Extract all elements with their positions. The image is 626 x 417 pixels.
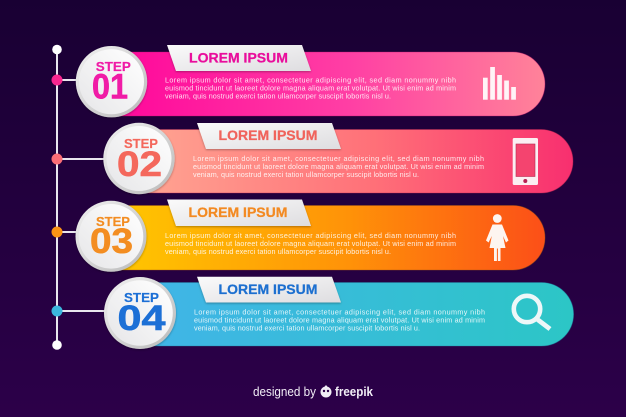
step badge 1: 01	[92, 67, 128, 106]
bar 1	[110, 52, 545, 116]
body text 2	[193, 154, 484, 179]
body text 4: veniam, quis nostrud exerci tation ullamcorper suscipit lobortis nisl u.	[194, 324, 420, 332]
body text 4: euismod tincidunt ut laoreet dolore magna aliquam erat volutpat. Ut wisi enim ad minim	[194, 316, 485, 324]
body text 3: euismod tincidunt ut laoreet dolore magna aliquam erat volutpat. Ut wisi enim ad minim	[165, 239, 456, 248]
heading ribbon 2: LOREM IPSUM	[218, 128, 318, 143]
panel: step 2	[103, 123, 573, 194]
bar 3	[110, 206, 545, 270]
step badge 4: STEP	[124, 290, 159, 305]
step badge 4: 04	[118, 299, 166, 338]
body text 2: veniam, quis nostrud exerci tation ullamcorper suscipit lobortis nisl u.	[193, 170, 419, 179]
body text 1: Lorem ipsum dolor sit amet, consectetuer adipiscing elit, sed diam nonummy nibh	[165, 76, 456, 84]
bar 4	[138, 282, 574, 346]
body text 3: veniam, quis nostrud exerci tation ullamcorper suscipit lobortis nisl u.	[165, 247, 391, 256]
body text 4: Lorem ipsum dolor sit amet, consectetuer adipiscing elit, sed diam nonummy nibh	[194, 308, 485, 316]
timeline	[52, 45, 115, 350]
body text 1: veniam, quis nostrud exerci tation ullamcorper suscipit lobortis nisl u.	[165, 92, 391, 100]
body text 3: Lorem ipsum dolor sit amet, consectetuer adipiscing elit, sed diam nonummy nibh	[165, 231, 456, 240]
step badge 4	[104, 277, 176, 349]
heading ribbon 2	[197, 123, 341, 149]
panel: step 3	[76, 200, 545, 272]
icon: bar chart	[483, 67, 516, 100]
step badge 1	[76, 46, 147, 117]
icon: woman	[486, 214, 508, 261]
heading ribbon 3: LOREM IPSUM	[188, 205, 288, 220]
heading ribbon 4	[197, 277, 341, 302]
body text 2: Lorem ipsum dolor sit amet, consectetuer adipiscing elit, sed diam nonummy nibh	[193, 154, 484, 163]
body text 1	[165, 76, 456, 100]
heading ribbon 1	[167, 45, 311, 71]
footer credit	[253, 384, 374, 399]
footer credit: designed by	[253, 385, 317, 399]
heading ribbon 4: LOREM IPSUM	[218, 282, 318, 297]
panel: step 4	[104, 277, 574, 349]
step badge 3: STEP	[96, 214, 130, 229]
heading ribbon 1: LOREM IPSUM	[189, 51, 288, 66]
step badge 3: 03	[90, 222, 133, 261]
panel: step 1	[76, 45, 545, 117]
body text 3	[165, 231, 456, 256]
icon: phone	[513, 138, 538, 185]
step badge 1: STEP	[96, 59, 131, 74]
footer credit: freepik	[335, 384, 374, 399]
icon: magnifier	[514, 296, 550, 329]
body text 4	[194, 308, 485, 332]
body text 2: euismod tincidunt ut laoreet dolore magna aliquam erat volutpat. Ut wisi enim ad minim	[193, 162, 484, 171]
bar 2	[138, 130, 573, 193]
step badge 3	[76, 201, 146, 272]
step badge 2	[103, 123, 175, 194]
body text 1: euismod tincidunt ut laoreet dolore magna aliquam erat volutpat. Ut wisi enim ad minim	[165, 84, 456, 92]
heading ribbon 3	[167, 200, 311, 226]
step badge 2: STEP	[124, 136, 158, 151]
step badge 2: 02	[117, 145, 162, 184]
